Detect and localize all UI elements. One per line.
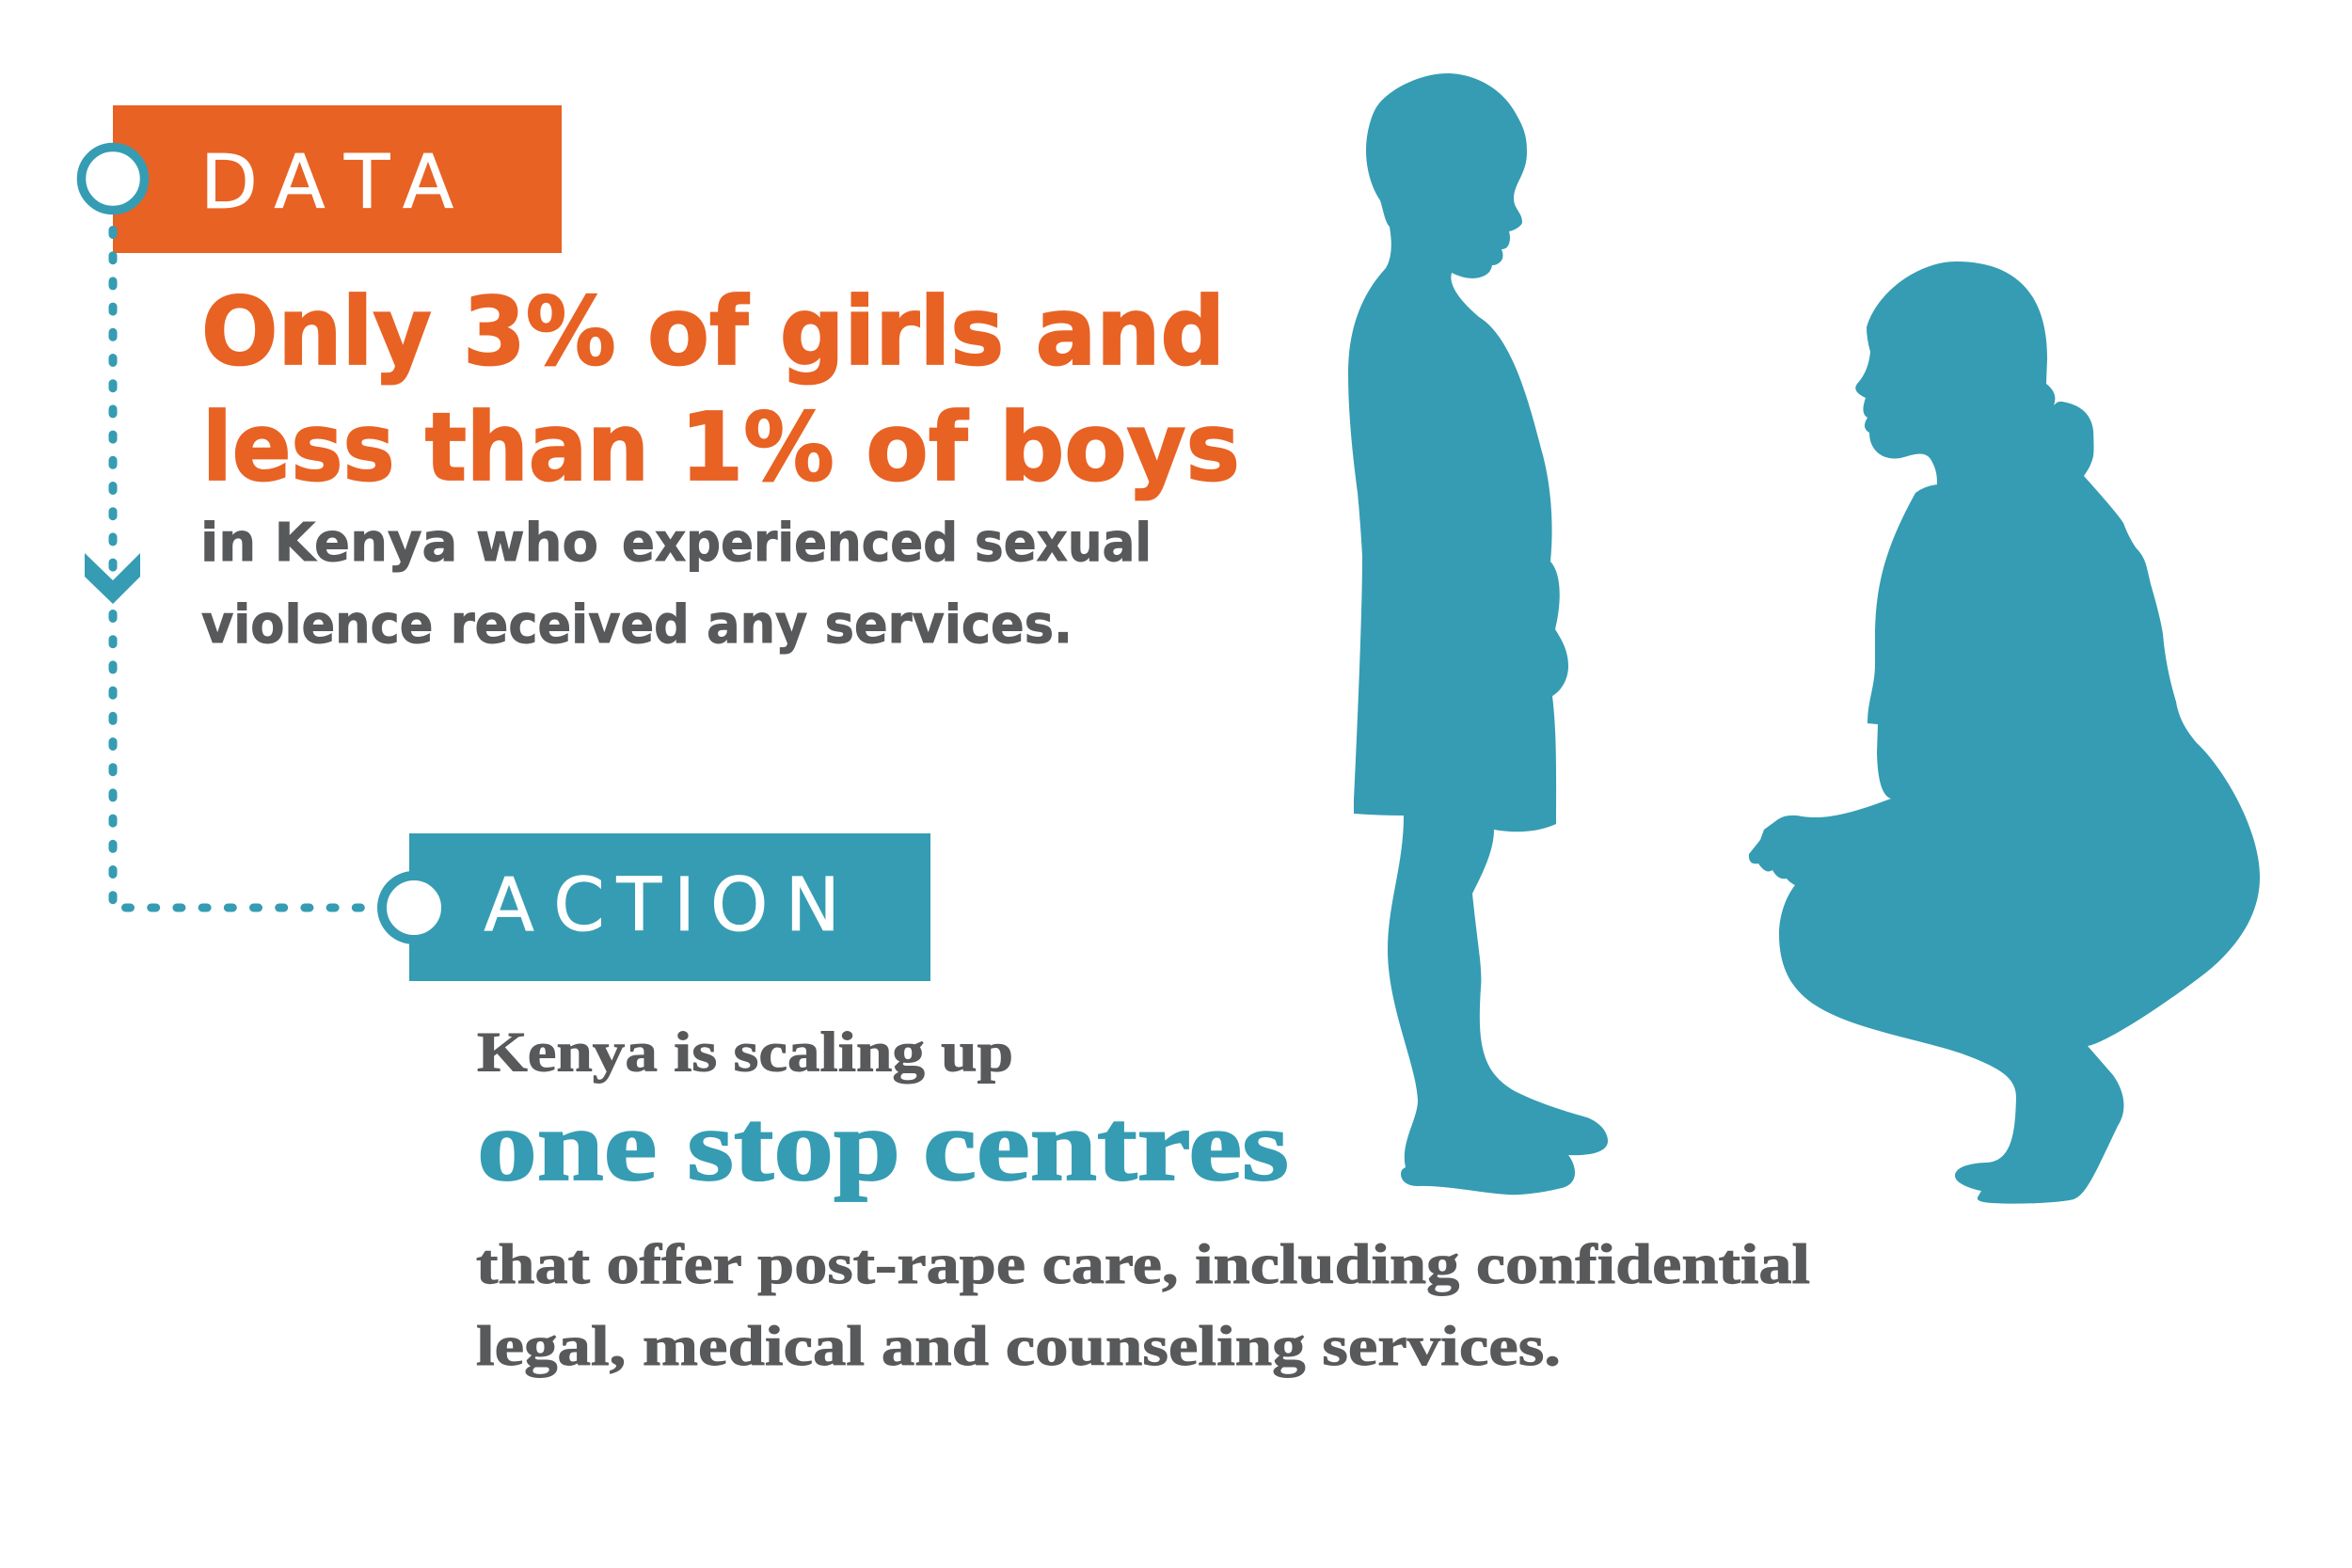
panel: data label: [113, 105, 562, 253]
text block: action description: [476, 1022, 1810, 1377]
headline line two, first part: less than: [202, 392, 649, 502]
action highlight: [477, 1090, 1289, 1202]
action highlight, second part: centres: [923, 1090, 1289, 1202]
headline line two: [202, 392, 1240, 502]
description line two: violence received any services.: [201, 594, 1073, 656]
action highlight, first part: one stop: [477, 1090, 900, 1202]
action detail line one: that offer post-rape care, including confidential: [476, 1233, 1810, 1295]
description line one: [200, 513, 1152, 574]
headline line one: Only 3% of girls and: [201, 277, 1225, 387]
chevron arrowhead: [85, 553, 140, 604]
arrow: dotted connector from data to action: [85, 230, 381, 908]
data label text: DATA: [200, 139, 453, 226]
text block: data headline: [201, 277, 1240, 502]
description line one, first part: in Kenya who: [200, 513, 598, 574]
icon: standing child silhouette: [1348, 73, 1608, 1195]
action label box: [409, 833, 930, 981]
icon: data ring marker: [81, 147, 145, 211]
action intro line: Kenya is scaling up: [477, 1022, 1013, 1084]
text block: data description: [200, 513, 1152, 656]
dotted horizontal line: [126, 903, 381, 912]
description line one, second part: experienced sexual: [622, 513, 1152, 574]
headline line two, second part: 1% of boys: [680, 392, 1240, 502]
panel: action label: [382, 833, 930, 981]
action detail line two: legal, medical and counseling services.: [476, 1315, 1561, 1377]
icon: crouching woman silhouette: [1749, 261, 2260, 1204]
dotted vertical line: [109, 230, 117, 900]
data label box: [113, 105, 562, 253]
icon: action ring marker: [382, 876, 446, 940]
action label text: ACTION: [484, 863, 840, 948]
